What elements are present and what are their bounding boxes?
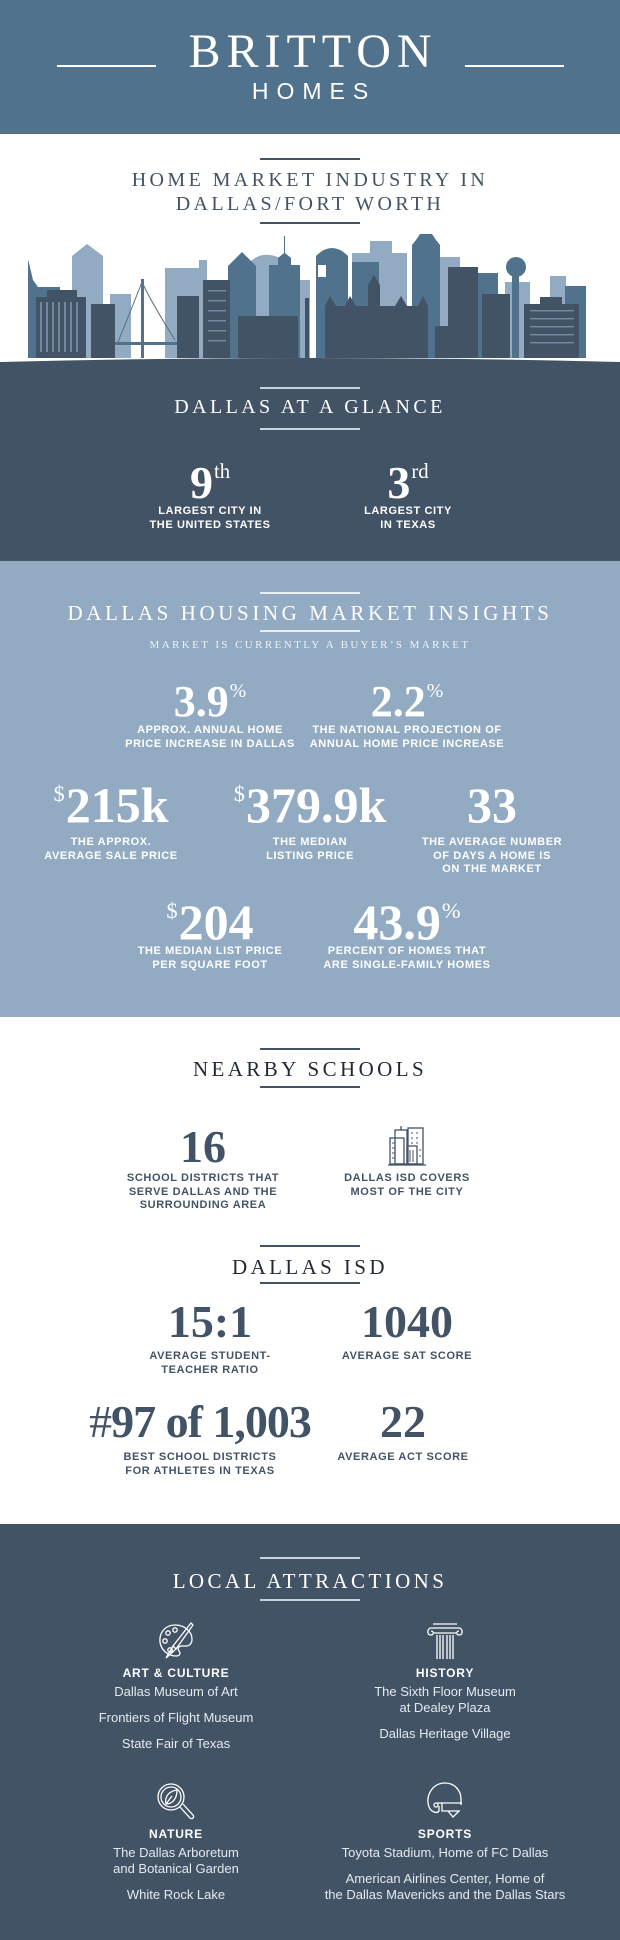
stat: 9th: LARGEST CITY IN <box>158 505 262 517</box>
heading: DALLAS HOUSING MARKET INSIGHTS <box>67 601 553 625</box>
attraction group: history <box>374 1666 516 1741</box>
stat: #97 of 1,003 <box>89 1396 311 1476</box>
subheading: MARKET IS CURRENTLY A BUYER’S MARKET <box>150 639 470 651</box>
stat: $379.9k: THE MEDIAN <box>273 836 347 848</box>
stat: 16 <box>127 1121 279 1211</box>
attraction group: history: at Dealey Plaza <box>399 1700 491 1715</box>
stat: 43.9%: PERCENT OF HOMES THAT <box>328 945 486 957</box>
attraction group: sports: American Airlines Center, Home of <box>346 1871 544 1886</box>
main title <box>132 158 488 224</box>
brand subtitle: HOMES <box>252 78 376 104</box>
attraction group: sports: Toyota Stadium, Home of FC Dallas <box>342 1845 548 1860</box>
stat: #97 of 1,003: FOR ATHLETES IN TEXAS <box>125 1464 275 1476</box>
heading: DALLAS AT A GLANCE <box>174 396 446 418</box>
stat: $215k: AVERAGE SALE PRICE <box>44 850 178 862</box>
stat: $204: PER SQUARE FOOT <box>152 958 268 970</box>
stat: 16: SCHOOL DISTRICTS THAT <box>127 1172 279 1184</box>
panel: dallas at a glance <box>0 358 620 561</box>
stat: 33: OF DAYS A HOME IS <box>433 850 551 862</box>
stat: 3.9% <box>125 677 295 750</box>
stat: 15:1: 15:1 <box>168 1296 252 1347</box>
stat: 1040: AVERAGE SAT SCORE <box>342 1350 472 1362</box>
stat: 33: THE AVERAGE NUMBER <box>422 836 562 848</box>
skyline illustration <box>28 234 586 358</box>
brand title: BRITTON <box>188 25 438 78</box>
main title: DALLAS/FORT WORTH <box>176 193 444 215</box>
stat: 3rd: IN TEXAS <box>380 518 436 530</box>
stat: 22 <box>337 1396 469 1463</box>
stat: $215k: $215k <box>53 777 169 833</box>
decorative line right <box>465 65 564 66</box>
stat: #97 of 1,003: #97 of 1,003 <box>89 1396 311 1447</box>
stat: 9th: 9th <box>190 457 230 508</box>
icon: leaf magnifier <box>157 1783 194 1820</box>
stat: 2.2% <box>310 677 504 750</box>
stat: 22: 22 <box>380 1396 426 1447</box>
attraction group: art & culture: ART & CULTURE <box>123 1666 229 1680</box>
icon: column <box>427 1623 463 1659</box>
stat: 3rd: 3rd <box>387 457 429 508</box>
stat: 16: 16 <box>180 1121 226 1172</box>
main title: HOME MARKET INDUSTRY IN <box>132 169 488 191</box>
stat: 33: 33 <box>467 777 517 833</box>
panel: nearby schools <box>0 1017 620 1524</box>
stat: $379.9k: $379.9k <box>234 777 386 833</box>
attraction group: history: HISTORY <box>416 1666 474 1680</box>
icon: palette <box>159 1622 194 1658</box>
attraction group: art & culture: Dallas Museum of Art <box>114 1684 238 1699</box>
icon: helmet <box>427 1782 462 1818</box>
stat: 3rd: LARGEST CITY <box>364 505 452 517</box>
stat: $215k: THE APPROX. <box>71 836 151 848</box>
stat: $204: $204 <box>166 894 254 950</box>
stat: 2.2%: THE NATIONAL PROJECTION OF <box>312 724 502 736</box>
panel: local attractions <box>0 1524 620 1940</box>
icon: buildings <box>388 1126 426 1166</box>
heading: dallas isd: DALLAS ISD <box>232 1255 388 1279</box>
stat: 15:1: TEACHER RATIO <box>161 1364 259 1376</box>
attraction group: art & culture: Frontiers of Flight Museum <box>99 1710 253 1725</box>
attraction group: sports: SPORTS <box>418 1827 472 1841</box>
attraction group: history: Dallas Heritage Village <box>379 1726 511 1741</box>
stat: 43.9%: 43.9% <box>353 894 461 950</box>
heading: NEARBY SCHOOLS <box>193 1057 427 1081</box>
attraction group: sports: the Dallas Mavericks and the Dallas Stars <box>325 1887 565 1902</box>
attraction group: art & culture <box>99 1666 253 1751</box>
stat: 3rd <box>364 457 452 530</box>
label: dallas isd covers: DALLAS ISD COVERS <box>344 1172 470 1184</box>
attraction group: art & culture: State Fair of Texas <box>122 1736 230 1751</box>
attraction group: sports <box>324 1827 565 1902</box>
attraction group: nature: NATURE <box>149 1827 203 1841</box>
stat: 3.9%: APPROX. ANNUAL HOME <box>137 724 283 736</box>
stat: 22: AVERAGE ACT SCORE <box>337 1451 469 1463</box>
stat: 3.9%: 3.9% <box>174 677 246 726</box>
stat: 15:1: AVERAGE STUDENT- <box>149 1350 271 1362</box>
label: dallas isd covers <box>344 1172 470 1198</box>
stat: $379.9k: LISTING PRICE <box>266 850 354 862</box>
stat: #97 of 1,003: BEST SCHOOL DISTRICTS <box>124 1451 276 1463</box>
stat: $204: THE MEDIAN LIST PRICE <box>138 945 282 957</box>
attraction group: nature: The Dallas Arboretum <box>113 1845 239 1860</box>
stat: 16: SURROUNDING AREA <box>140 1199 266 1211</box>
stat: 2.2%: 2.2% <box>371 677 443 726</box>
stat: 3.9%: PRICE INCREASE IN DALLAS <box>125 738 295 750</box>
attraction group: history: The Sixth Floor Museum <box>374 1684 516 1699</box>
stat: 33: ON THE MARKET <box>442 863 542 875</box>
stat: 1040: 1040 <box>361 1296 453 1347</box>
stat: $379.9k <box>234 777 386 862</box>
decorative line left <box>57 65 156 66</box>
attraction group: nature <box>113 1827 239 1902</box>
stat: $215k <box>44 777 178 862</box>
stat: 15:1 <box>149 1296 271 1376</box>
heading: LOCAL ATTRACTIONS <box>173 1569 447 1593</box>
header <box>0 0 620 134</box>
attraction group: nature: and Botanical Garden <box>113 1861 239 1876</box>
panel: housing market insights <box>0 561 620 1017</box>
stat: 43.9%: ARE SINGLE-FAMILY HOMES <box>323 958 491 970</box>
stat: 2.2%: ANNUAL HOME PRICE INCREASE <box>310 738 504 750</box>
stat: 16: SERVE DALLAS AND THE <box>129 1186 277 1198</box>
stat: $204 <box>138 894 282 970</box>
stat: 9th <box>149 457 271 530</box>
stat: 43.9% <box>323 894 491 970</box>
stat: 33 <box>422 777 562 875</box>
attraction group: nature: White Rock Lake <box>127 1887 225 1902</box>
label: dallas isd covers: MOST OF THE CITY <box>351 1186 463 1198</box>
stat: 1040 <box>342 1296 472 1362</box>
stat: 9th: THE UNITED STATES <box>149 518 271 530</box>
